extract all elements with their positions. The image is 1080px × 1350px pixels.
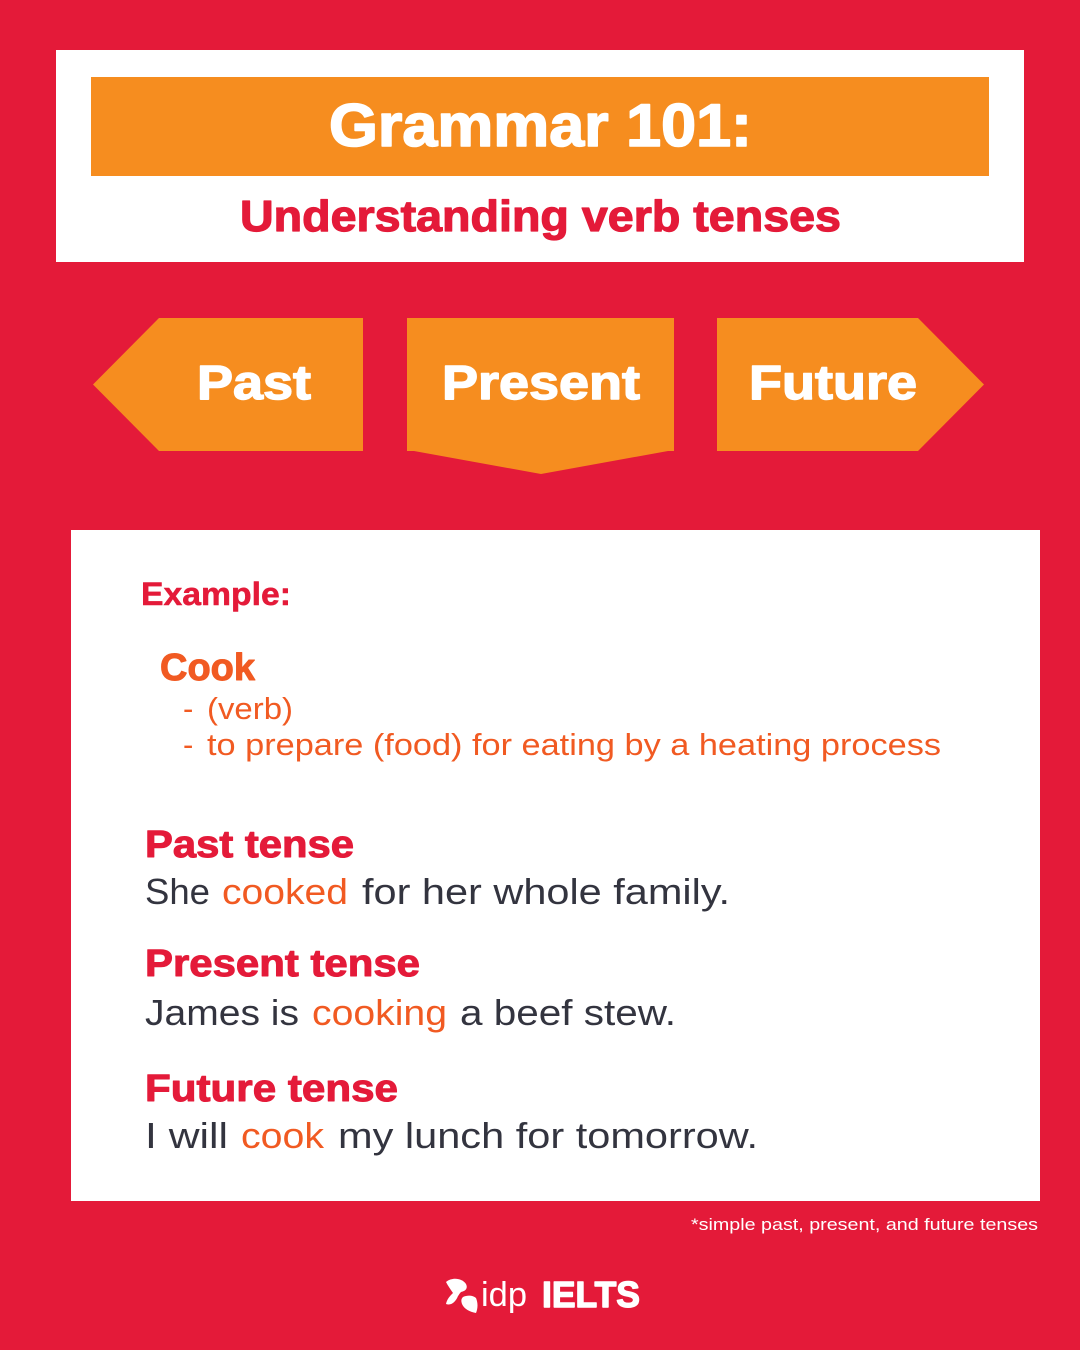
- title banner: [91, 77, 989, 176]
- arrow: present: [407, 318, 674, 474]
- past tense example: Past tense: [145, 824, 354, 866]
- arrow: past: [93, 318, 363, 451]
- definition: cook: Cook: [160, 647, 256, 689]
- logo: idp IELTS: [446, 1274, 640, 1315]
- subtitle: Understanding verb tenses: [240, 192, 841, 241]
- past tense example: cooked: [222, 871, 348, 912]
- future tense example: Future tense: [145, 1068, 398, 1110]
- logo wordmark: idp: idp: [481, 1276, 527, 1314]
- future tense example: [145, 1068, 758, 1156]
- future tense example: I will: [145, 1115, 228, 1156]
- arrow: future: [717, 318, 984, 451]
- present tense example: Present tense: [145, 943, 420, 985]
- future tense example: my lunch for tomorrow.: [338, 1115, 758, 1156]
- past tense example: for her whole family.: [362, 871, 730, 912]
- header panel: [56, 50, 1024, 262]
- present tense example: James is: [145, 992, 299, 1033]
- definition: cook: to prepare (food) for eating by a heating process: [207, 727, 941, 762]
- logo wordmark: IELTS: IELTS: [542, 1274, 640, 1315]
- present tense example: a beef stew.: [460, 992, 676, 1033]
- past tense example: [145, 824, 730, 912]
- example panel: [71, 530, 1040, 1201]
- definition: cook: -: [183, 727, 193, 762]
- present tense example: cooking: [312, 992, 447, 1033]
- present tense example: [145, 943, 676, 1033]
- definition: cook: [160, 647, 941, 762]
- arrow: present: Present: [442, 357, 640, 410]
- icon: idp leaves: [446, 1279, 478, 1313]
- arrow: past: Past: [197, 357, 311, 410]
- example label: Example:: [141, 576, 291, 612]
- arrow: future: Future: [749, 357, 917, 410]
- title banner: Grammar 101:: [329, 92, 752, 159]
- definition: cook: -: [183, 691, 193, 726]
- past tense example: She: [145, 871, 210, 912]
- footnote: *simple past, present, and future tenses: [691, 1215, 1038, 1234]
- future tense example: cook: [241, 1115, 325, 1156]
- definition: cook: (verb): [207, 691, 293, 726]
